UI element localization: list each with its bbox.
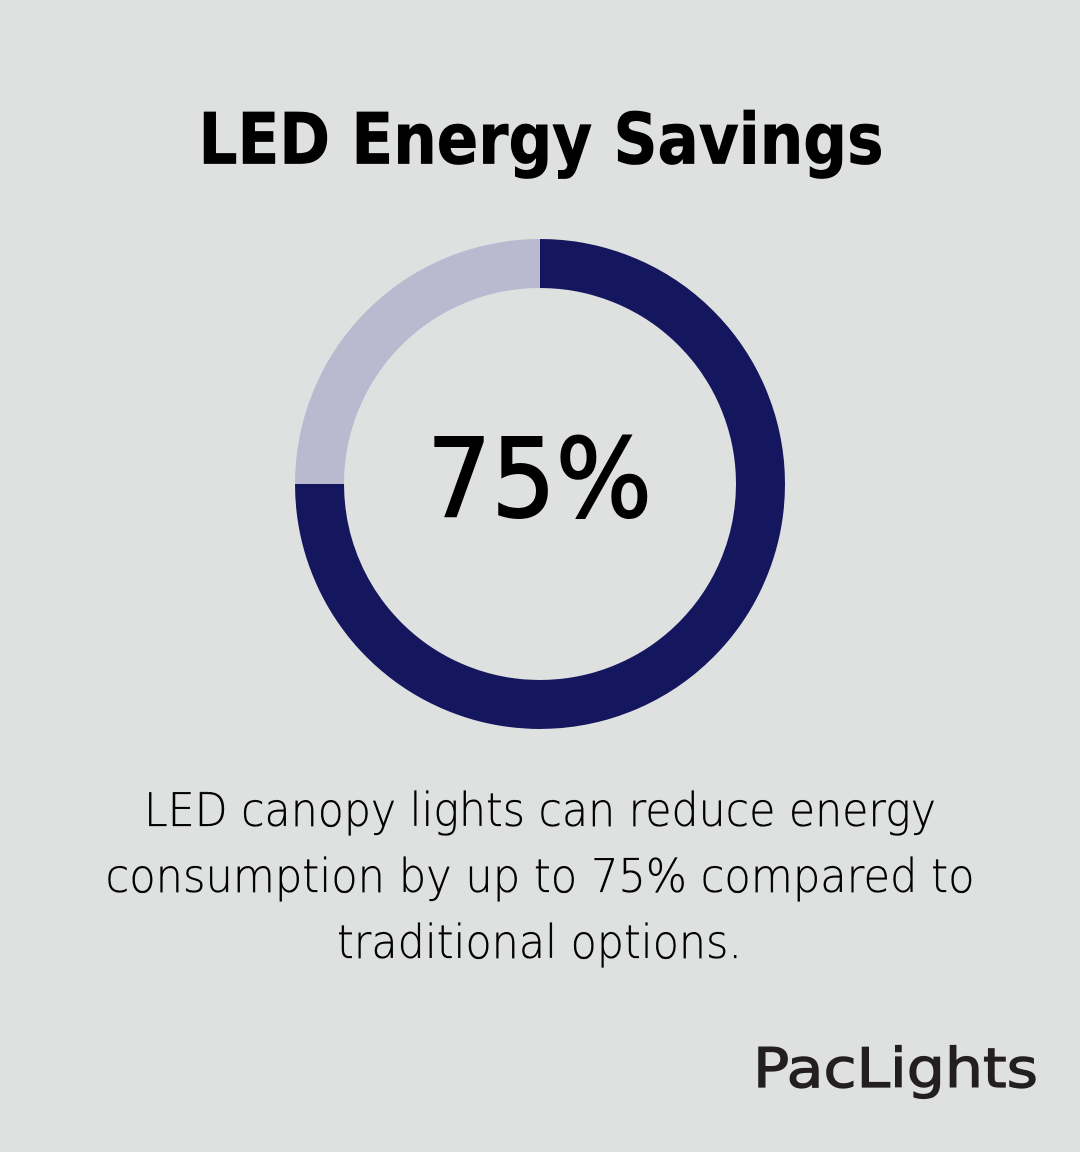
- description text: [106, 783, 974, 969]
- description text: LED canopy lights can reduce energy: [144, 783, 936, 837]
- center value: 75%: [427, 416, 652, 542]
- donut chart: 75%: [320, 264, 760, 704]
- description text: traditional options.: [337, 915, 742, 969]
- remaining 25% ring segment: [320, 264, 540, 484]
- title: LED Energy Savings: [198, 98, 884, 180]
- description text: consumption by up to 75% compared to: [106, 849, 974, 903]
- 75% ring segment: [320, 264, 760, 704]
- logo: PacLights: PacLights: [753, 1037, 1038, 1100]
